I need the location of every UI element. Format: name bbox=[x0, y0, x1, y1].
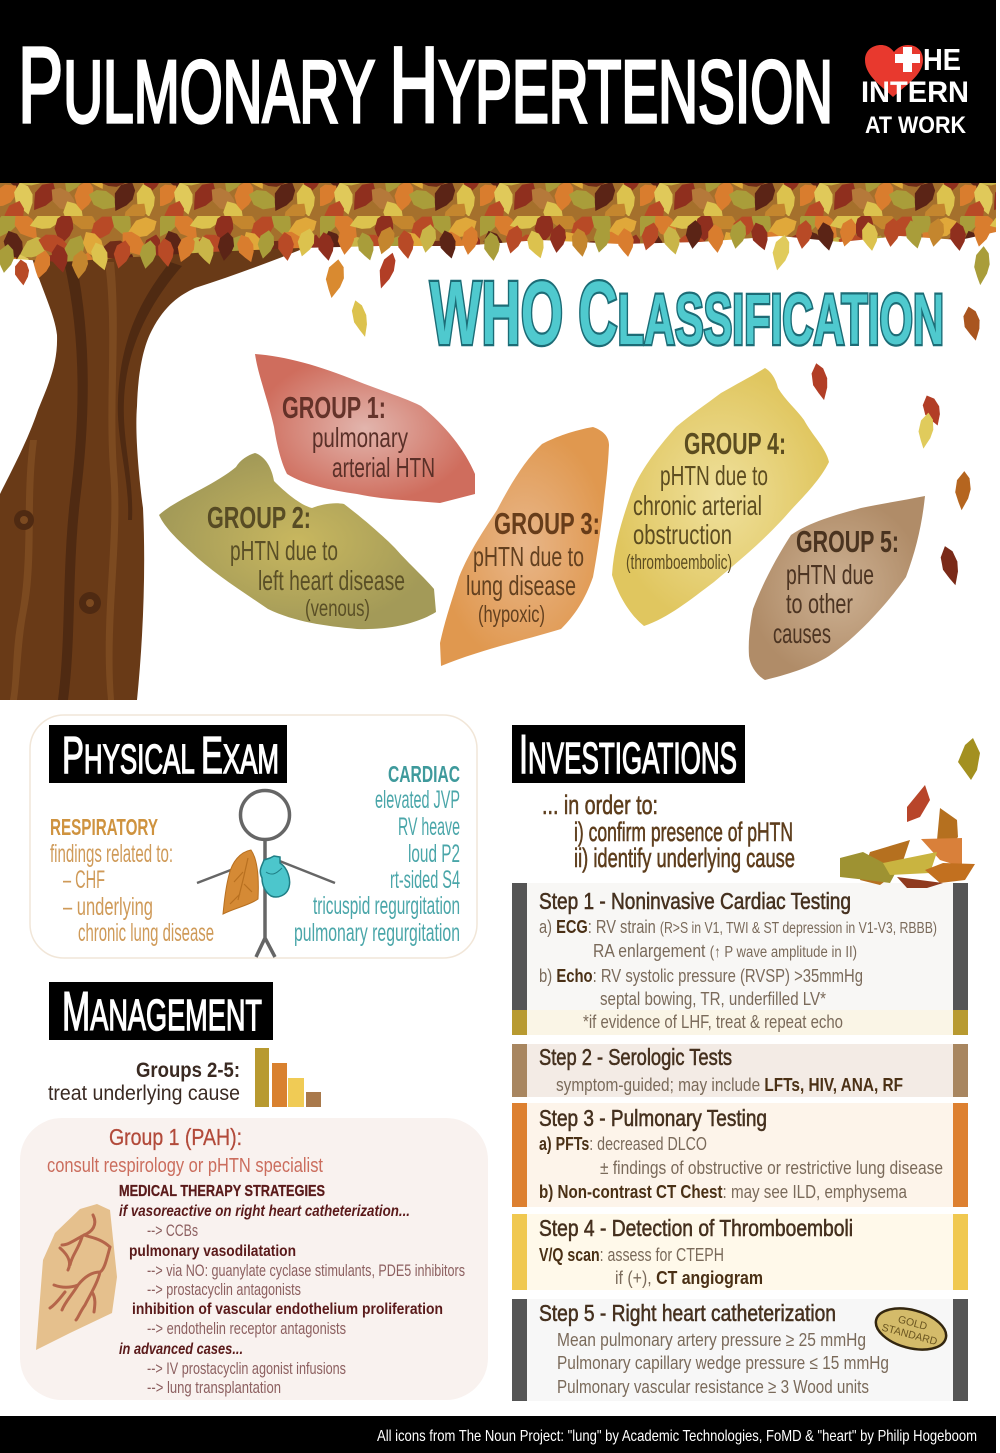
leaf: group 2: left heart disease bbox=[258, 565, 405, 596]
leaf: group 5 bbox=[749, 496, 925, 680]
panel: step 2 bbox=[512, 1044, 968, 1097]
panel: step 4 bbox=[512, 1214, 968, 1290]
badge: gold standard: GOLD bbox=[897, 1314, 929, 1333]
panel: step 4: if (+), CT angiogram bbox=[615, 1267, 763, 1288]
panel: step 3: ± findings of obstructive or restrictive lung disease bbox=[600, 1157, 943, 1178]
leaf: group 3: pHTN due to bbox=[473, 541, 584, 572]
text: group 1 heading: Group 1 (PAH): bbox=[109, 1124, 242, 1150]
text: medical therapy strategies: --> via NO: guanylate cyclase stimulants, PDE5 inhibitors bbox=[147, 1262, 465, 1280]
leaf: group 4: chronic arterial bbox=[633, 490, 762, 521]
text: groups 2-5: treat underlying cause bbox=[48, 1082, 240, 1105]
panel: step 3: Step 3 - Pulmonary Testing bbox=[539, 1105, 767, 1131]
panel: step 4: V/Q scan: assess for CTEPH bbox=[539, 1244, 724, 1265]
text: respiratory findings: RESPIRATORY bbox=[50, 814, 158, 840]
panel: step 3: b) Non-contrast CT Chest: may see ILD, emphysema bbox=[539, 1181, 908, 1202]
text: respiratory findings: – underlying bbox=[63, 893, 153, 921]
text: medical therapy strategies: --> endothelin receptor antagonists bbox=[147, 1320, 346, 1338]
leaf: group 4: (thromboembolic) bbox=[626, 552, 732, 574]
leaf: group 1: pulmonary bbox=[312, 422, 408, 453]
heading: investigations: INVESTIGATIONS bbox=[519, 723, 737, 785]
icon: lung bbox=[223, 850, 258, 914]
logo: the intern at work: HE bbox=[923, 42, 961, 77]
text: medical therapy strategies: inhibition of vascular endothelium proliferation bbox=[132, 1301, 443, 1318]
panel: step 1: Step 1 - Noninvasive Cardiac Testing bbox=[539, 888, 851, 914]
text: groups 2-5 bbox=[48, 1059, 240, 1105]
text: cardiac findings: rt-sided S4 bbox=[390, 866, 460, 894]
panel: step 1: RA enlargement (↑ P wave amplitude in II) bbox=[593, 940, 857, 961]
leaf: group 4: obstruction bbox=[633, 519, 732, 550]
text: respiratory findings bbox=[50, 814, 214, 947]
panel: step 3 bbox=[512, 1103, 968, 1207]
panel: step 5: Step 5 - Right heart catheterization bbox=[539, 1300, 836, 1326]
panel: group 1 PAH bbox=[20, 1118, 488, 1400]
text: cardiac findings: tricuspid regurgitation bbox=[313, 892, 460, 920]
panel: step 2: Step 2 - Serologic Tests bbox=[539, 1044, 732, 1070]
text: medical therapy strategies bbox=[119, 1183, 465, 1397]
text: medical therapy strategies: pulmonary vasodilatation bbox=[129, 1243, 296, 1260]
leaf: group 3: (hypoxic) bbox=[478, 601, 545, 627]
text: in order to: ... in order to: bbox=[542, 790, 658, 820]
panel: step 1: b) Echo: RV systolic pressure (RVSP) >35mmHg bbox=[539, 965, 863, 986]
leaf: group 3 bbox=[440, 427, 609, 666]
text: in order to: i) confirm presence of pHTN bbox=[574, 817, 793, 847]
leaves: pile and falling leaves by investigations bbox=[840, 738, 980, 888]
text: medical therapy strategies: --> IV prostacyclin agonist infusions bbox=[147, 1360, 346, 1378]
tree trunk bbox=[0, 248, 305, 700]
header band bbox=[0, 0, 996, 183]
text: groups 2-5: Groups 2-5: bbox=[136, 1059, 240, 1082]
panel: step 1: septal bowing, TR, underfilled LV* bbox=[600, 988, 826, 1009]
leaf: group 5: GROUP 5: bbox=[796, 524, 899, 559]
heading: investigations bbox=[512, 723, 745, 785]
text: respiratory findings: findings related to: bbox=[50, 840, 173, 868]
text: in order to bbox=[542, 790, 795, 873]
panel: step 5: Pulmonary capillary wedge pressure ≤ 15 mmHg bbox=[557, 1352, 889, 1373]
text: medical therapy strategies: --> CCBs bbox=[147, 1222, 198, 1240]
logo: the intern at work: AT WORK bbox=[865, 112, 967, 139]
leaf: group 1: arterial HTN bbox=[332, 452, 435, 483]
falling leaves top bbox=[323, 233, 991, 587]
chart: descending bars bbox=[255, 1048, 321, 1107]
text: cardiac findings: pulmonary regurgitation bbox=[294, 919, 460, 947]
text: cardiac findings: loud P2 bbox=[408, 840, 460, 868]
panel: step 2: symptom-guided; may include LFTs, HIV, ANA, RF bbox=[556, 1074, 903, 1095]
tree canopy leaves bbox=[0, 183, 996, 286]
text: respiratory findings: chronic lung disease bbox=[78, 919, 214, 947]
text: cardiac findings: CARDIAC bbox=[388, 761, 460, 787]
leaf: group 2: (venous) bbox=[305, 595, 370, 621]
leaf: group 4: GROUP 4: bbox=[684, 426, 786, 461]
text: medical therapy strategies: MEDICAL THERAPY STRATEGIES bbox=[119, 1183, 325, 1200]
logo: the intern at work bbox=[861, 42, 969, 139]
text: cardiac findings: elevated JVP bbox=[375, 786, 460, 814]
icon: lung with vessels bbox=[36, 1204, 117, 1350]
icon: heart bbox=[260, 856, 290, 897]
heading: management: MANAGEMENT bbox=[62, 980, 262, 1042]
leaf: group 5: to other bbox=[786, 588, 853, 619]
leaf: group 1 bbox=[255, 354, 475, 503]
text: medical therapy strategies: if vasoreactive on right heart catheterization... bbox=[119, 1203, 410, 1220]
heading: physical exam: PHYSICAL EXAM bbox=[62, 727, 279, 785]
panel: step 5 bbox=[512, 1299, 968, 1401]
panel: step 1: *if evidence of LHF, treat & repeat echo bbox=[583, 1011, 843, 1032]
icon: heart with cross bbox=[865, 45, 923, 97]
panel: step 4: Step 4 - Detection of Thromboemboli bbox=[539, 1215, 853, 1241]
text: in order to: ii) identify underlying cause bbox=[574, 843, 795, 873]
panel: step 5: Pulmonary vascular resistance ≥ 3 Wood units bbox=[557, 1376, 869, 1397]
leaf: group 4: pHTN due to bbox=[660, 460, 768, 491]
panel: step 3: a) PFTs: decreased DLCO bbox=[539, 1133, 707, 1154]
panel: step 5: Mean pulmonary artery pressure ≥ 25 mmHg bbox=[557, 1329, 866, 1350]
text: respiratory findings: – CHF bbox=[63, 866, 105, 894]
text: medical therapy strategies: in advanced cases... bbox=[119, 1341, 243, 1358]
badge: gold standard: STANDARD bbox=[880, 1322, 939, 1348]
leaf: group 5: pHTN due bbox=[786, 559, 874, 590]
heading: management bbox=[49, 980, 273, 1042]
leaf: group 3: GROUP 3: bbox=[494, 506, 600, 541]
text: medical therapy strategies: --> prostacyclin antagonists bbox=[147, 1281, 301, 1299]
panel: step 1: a) ECG: RV strain (R>S in V1, TWI & ST depression in V1-V3, RBBB) bbox=[539, 916, 937, 937]
leaf: group 2 bbox=[159, 453, 436, 629]
leaf: group 3: lung disease bbox=[466, 570, 576, 601]
leaf: group 2: pHTN due to bbox=[230, 535, 338, 566]
badge: gold standard bbox=[871, 1301, 951, 1357]
panel: physical exam bbox=[30, 715, 477, 958]
logo: the intern at work: INTERN bbox=[861, 76, 969, 109]
text: consult line: consult respirology or pHTN specialist bbox=[47, 1155, 323, 1177]
icon: stick figure bbox=[197, 790, 335, 957]
leaf: group 4 bbox=[612, 368, 829, 626]
text: medical therapy strategies: --> lung transplantation bbox=[147, 1379, 281, 1397]
footer bbox=[0, 1416, 996, 1453]
text: cardiac findings bbox=[294, 761, 460, 947]
text: cardiac findings: RV heave bbox=[398, 813, 460, 841]
panel: step 1 bbox=[512, 883, 968, 1035]
leaf: group 1: GROUP 1: bbox=[282, 390, 386, 425]
leaf: group 2: GROUP 2: bbox=[207, 500, 311, 535]
leaf: group 5: causes bbox=[773, 618, 831, 649]
